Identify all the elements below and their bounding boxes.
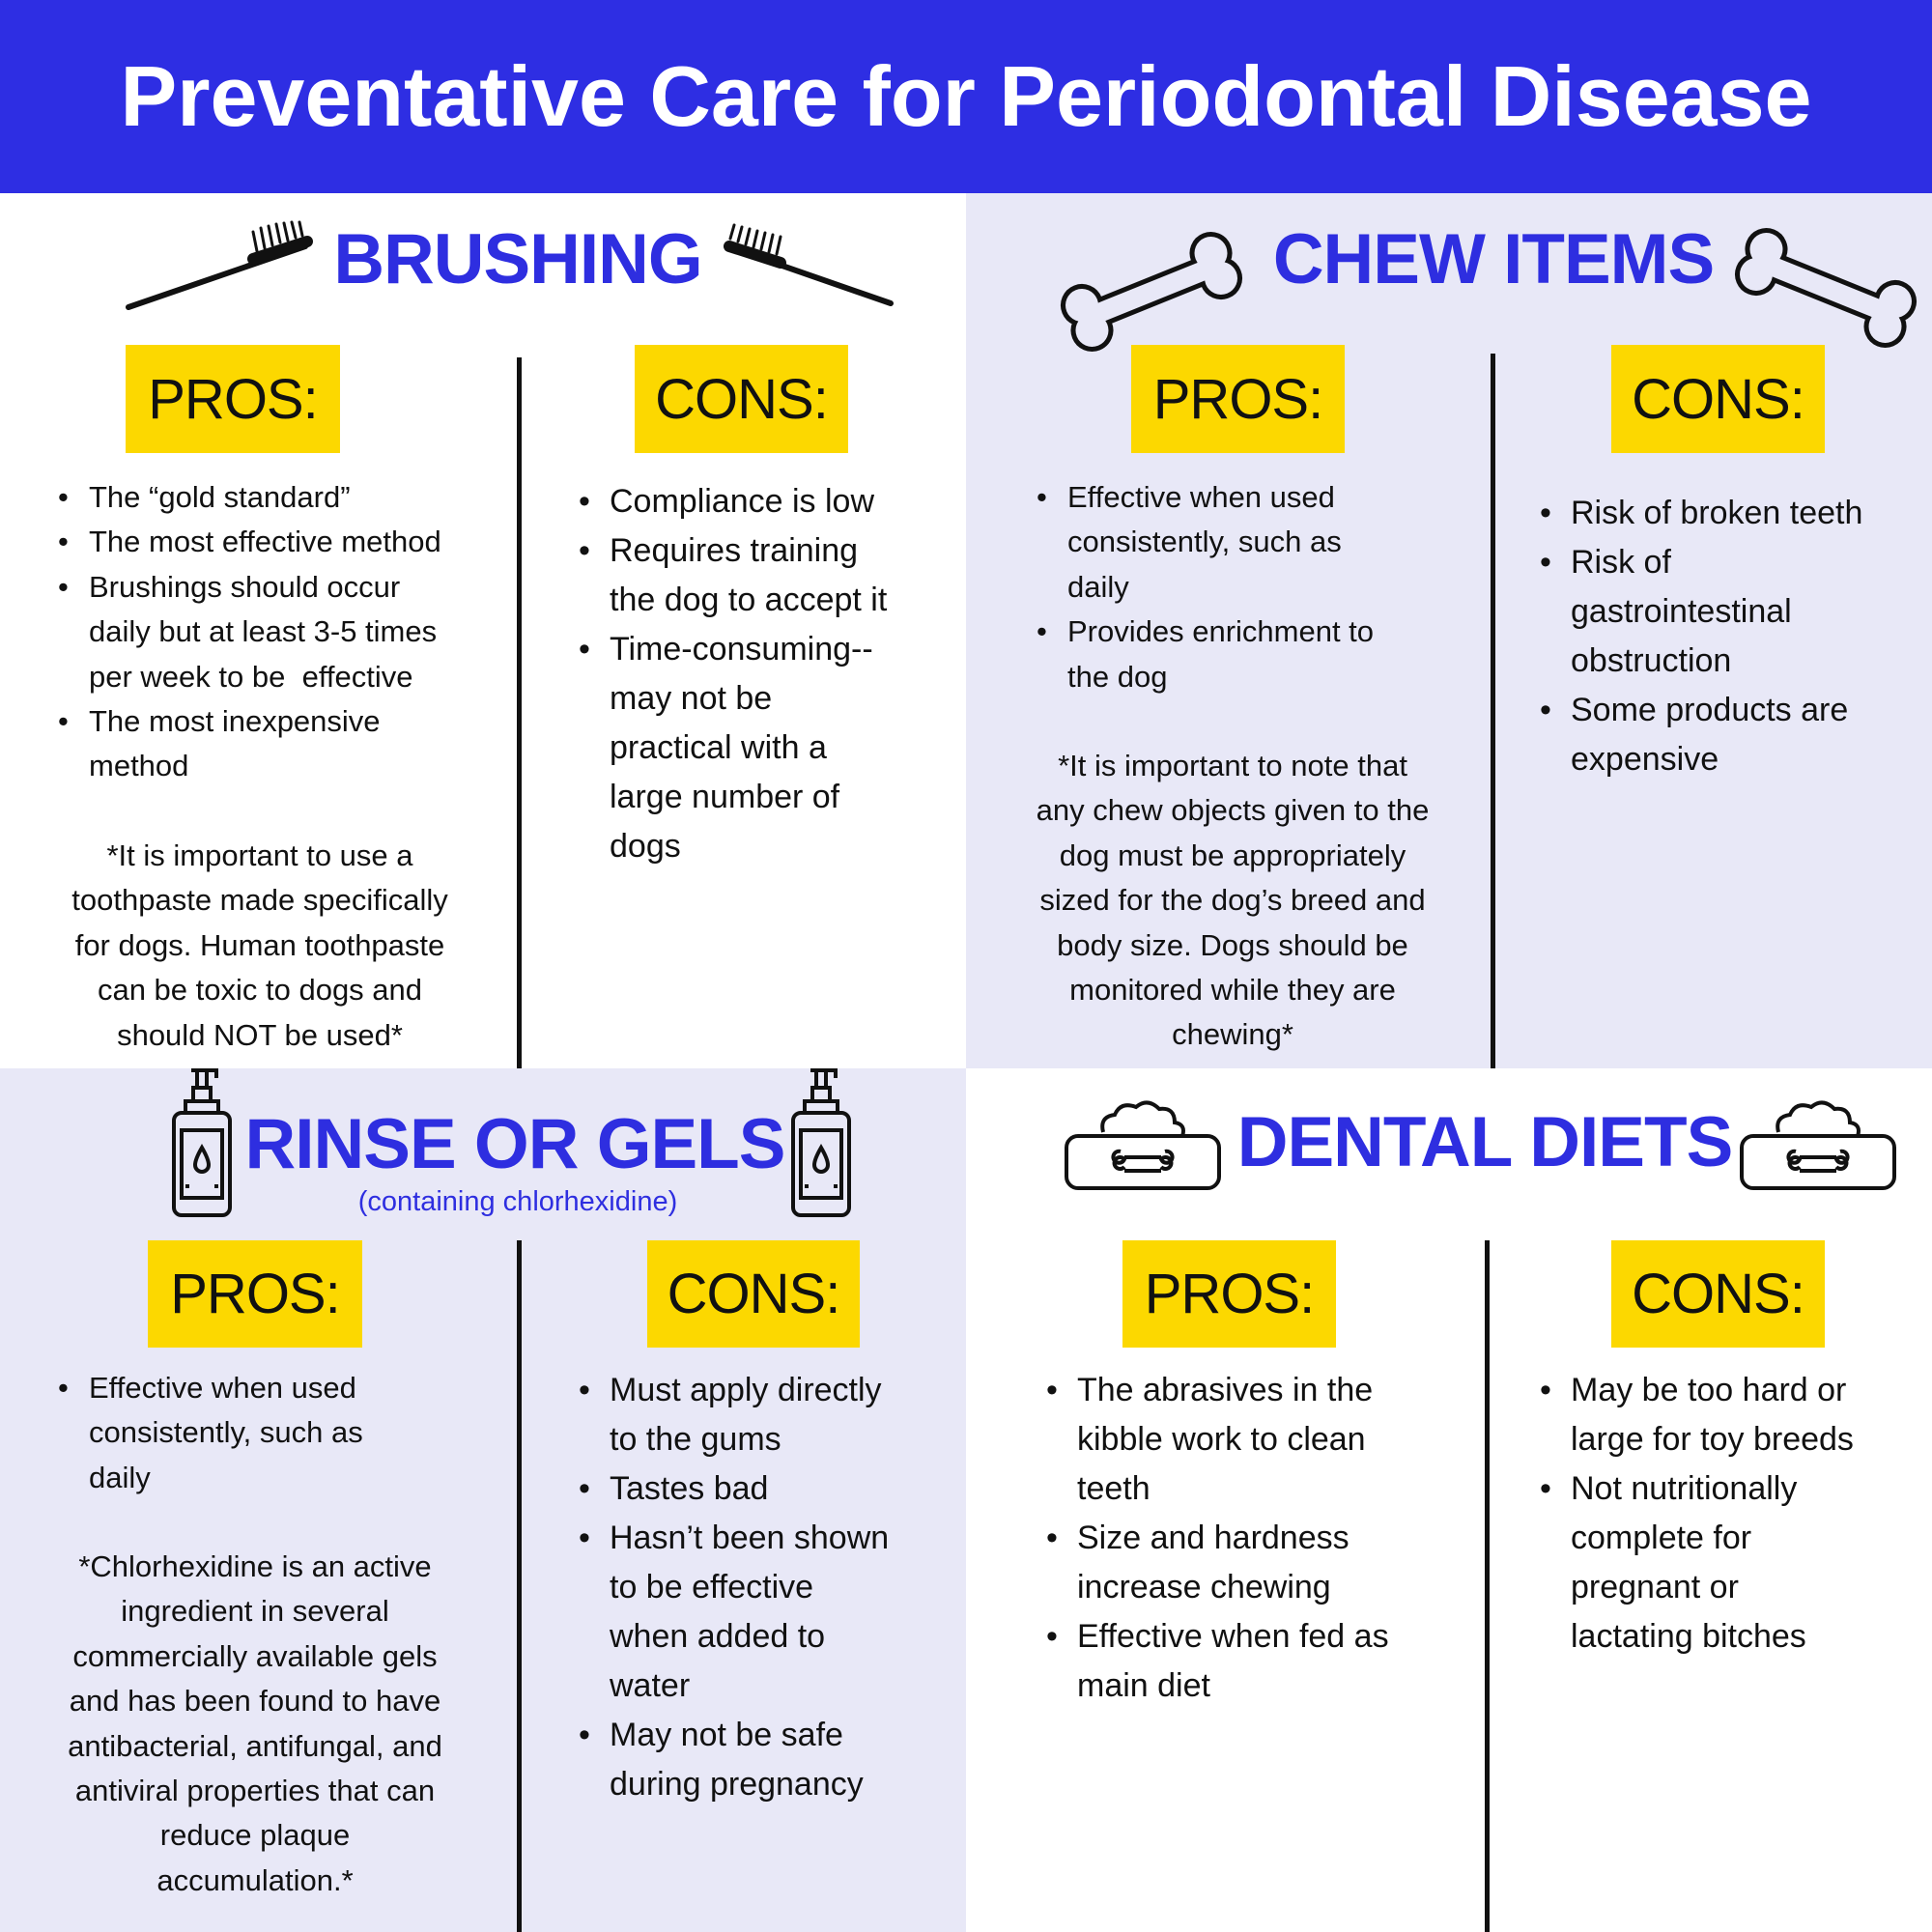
note: chewing*: [1172, 1017, 1293, 1051]
cons list: [1541, 1372, 1854, 1655]
panel: dental diets: [1047, 1103, 1854, 1704]
cons tag: [647, 1240, 860, 1348]
cons tag: [635, 345, 848, 453]
cons list: water: [610, 1667, 690, 1704]
note: [71, 838, 448, 1052]
pros list: teeth: [1077, 1470, 1151, 1507]
icon: bone right: [1735, 228, 1917, 348]
note: for dogs. Human toothpaste: [75, 928, 444, 962]
pros list: daily: [89, 1461, 151, 1494]
pros list: The abrasives in the: [1077, 1372, 1373, 1408]
pros list: daily but at least 3-5 times: [89, 614, 437, 648]
pros list: kibble work to clean: [1077, 1421, 1366, 1458]
cons list: to be effective: [610, 1569, 813, 1605]
note: *Chlorhexidine is an active: [78, 1549, 432, 1583]
cons list: Some products are: [1571, 692, 1848, 728]
header banner: [0, 0, 1932, 193]
heading: brushing: BRUSHING: [333, 220, 702, 298]
icon: bottle right: [793, 1070, 849, 1215]
pros tag: PROS:: [1153, 367, 1322, 431]
pros list: the dog: [1067, 660, 1167, 694]
pros tag: PROS:: [148, 367, 318, 431]
cons list: to the gums: [610, 1421, 781, 1458]
pros list: per week to be effective: [89, 660, 412, 694]
panel: brushing: [59, 220, 887, 1052]
note: antibacterial, antifungal, and: [68, 1729, 442, 1763]
cons list: Hasn’t been shown: [610, 1520, 889, 1556]
note: can be toxic to dogs and: [98, 973, 422, 1007]
note: dog must be appropriately: [1060, 838, 1406, 872]
icon: bowl right: [1742, 1102, 1894, 1188]
note: [1037, 749, 1429, 1051]
panel backgrounds: [966, 193, 1932, 1068]
pros list: [59, 1371, 363, 1494]
note: [68, 1549, 442, 1897]
note: reduce plaque: [160, 1818, 350, 1852]
cons list: dogs: [610, 828, 681, 865]
heading: dental diets: DENTAL DIETS: [1237, 1103, 1732, 1181]
pros tag: PROS:: [170, 1263, 340, 1325]
cons list: Risk of broken teeth: [1571, 495, 1862, 531]
cons list: when added to: [610, 1618, 825, 1655]
cons list: practical with a: [610, 729, 827, 766]
pros list: Size and hardness: [1077, 1520, 1350, 1556]
pros list: increase chewing: [1077, 1569, 1331, 1605]
panel: rinse or gels: [59, 1105, 889, 1897]
pros list: consistently, such as: [1067, 525, 1342, 558]
pros tag: [1122, 1240, 1336, 1348]
note: *It is important to note that: [1058, 749, 1407, 782]
pros list: The most effective method: [89, 525, 441, 558]
cons list: [580, 1372, 889, 1803]
dividers: [517, 357, 522, 1068]
cons list: obstruction: [1571, 642, 1731, 679]
icon: toothbrush left: [128, 222, 307, 307]
pros list: [1047, 1372, 1389, 1704]
cons list: May not be safe: [610, 1717, 843, 1753]
cons list: Not nutritionally: [1571, 1470, 1797, 1507]
heading: chew items: CHEW ITEMS: [1273, 220, 1714, 298]
note: antiviral properties that can: [75, 1774, 435, 1807]
pros list: Provides enrichment to: [1067, 614, 1374, 648]
note: *It is important to use a: [106, 838, 413, 872]
panel: chew items: [1037, 220, 1862, 1051]
note: and has been found to have: [70, 1684, 440, 1718]
heading: rinse or gels: RINSE OR GELS: [245, 1105, 784, 1183]
cons list: gastrointestinal: [1571, 593, 1792, 630]
cons list: lactating bitches: [1571, 1618, 1806, 1655]
pros list: The “gold standard”: [89, 480, 351, 514]
cons list: expensive: [1571, 741, 1719, 778]
cons list: the dog to accept it: [610, 582, 887, 618]
cons list: Must apply directly: [610, 1372, 882, 1408]
icon: bone left: [1061, 232, 1242, 352]
cons tag: CONS:: [668, 1263, 839, 1325]
note: sized for the dog’s breed and: [1039, 883, 1426, 917]
cons list: [1541, 495, 1862, 778]
cons tag: CONS:: [1632, 367, 1804, 431]
note: body size. Dogs should be: [1057, 928, 1408, 962]
note: toothpaste made specifically: [71, 883, 448, 917]
icon: bowl left: [1066, 1102, 1219, 1188]
note: should NOT be used*: [117, 1018, 403, 1052]
cons list: Risk of: [1571, 544, 1671, 581]
note: ingredient in several: [121, 1594, 389, 1628]
pros list: Effective when used: [89, 1371, 356, 1405]
title: Preventative Care for Periodontal Disease: [121, 48, 1811, 144]
cons tag: [1611, 1240, 1825, 1348]
cons tag: [1611, 345, 1825, 453]
pros list: daily: [1067, 570, 1129, 604]
cons list: complete for: [1571, 1520, 1751, 1556]
note: any chew objects given to the: [1037, 793, 1429, 827]
note: accumulation.*: [156, 1863, 354, 1897]
pros list: Effective when fed as: [1077, 1618, 1389, 1655]
cons list: Time-consuming--: [610, 631, 873, 668]
subtitle: (containing chlorhexidine): [358, 1186, 677, 1217]
pros list: Brushings should occur: [89, 570, 400, 604]
pros list: Effective when used: [1067, 480, 1335, 514]
note: monitored while they are: [1069, 973, 1396, 1007]
pros list: method: [89, 749, 188, 782]
cons list: [580, 483, 887, 865]
pros tag: [126, 345, 340, 453]
cons list: during pregnancy: [610, 1766, 864, 1803]
cons list: pregnant or: [1571, 1569, 1739, 1605]
pros tag: [148, 1240, 362, 1348]
pros list: The most inexpensive: [89, 704, 381, 738]
icon: toothbrush right: [726, 225, 891, 303]
cons tag: CONS:: [655, 367, 828, 431]
cons list: large number of: [610, 779, 839, 815]
pros list: main diet: [1077, 1667, 1210, 1704]
cons list: Tastes bad: [610, 1470, 768, 1507]
cons list: May be too hard or: [1571, 1372, 1846, 1408]
note: commercially available gels: [72, 1639, 438, 1673]
cons tag: CONS:: [1632, 1263, 1804, 1325]
pros tag: PROS:: [1145, 1263, 1314, 1325]
icon: bottle left: [174, 1070, 230, 1215]
pros list: consistently, such as: [89, 1415, 363, 1449]
cons list: large for toy breeds: [1571, 1421, 1854, 1458]
pros list: [1037, 480, 1374, 694]
pros list: [59, 480, 441, 782]
pros tag: [1131, 345, 1345, 453]
cons list: Compliance is low: [610, 483, 874, 520]
cons list: may not be: [610, 680, 772, 717]
cons list: Requires training: [610, 532, 858, 569]
